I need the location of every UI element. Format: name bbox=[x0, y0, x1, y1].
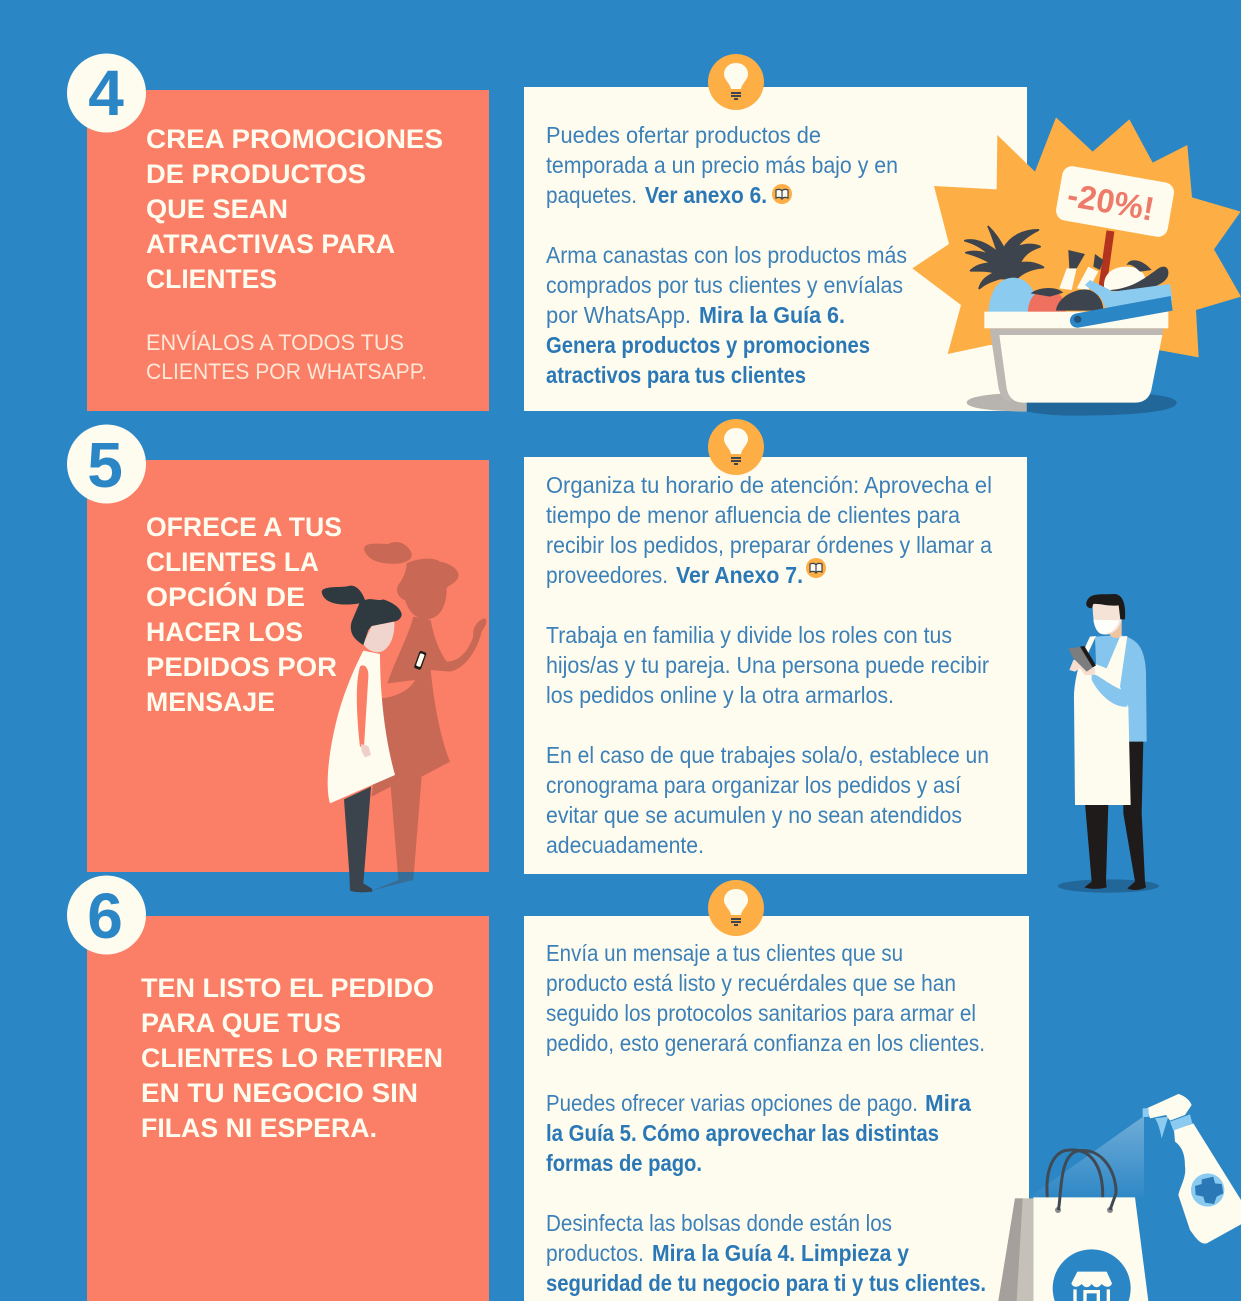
text block: step 4 tips: Puedes ofertar productos de bbox=[546, 122, 821, 148]
panel: step 4 heading card bbox=[87, 90, 489, 411]
icon: book annex 6 bbox=[772, 184, 792, 204]
panel: step 6 tips bbox=[524, 916, 1029, 1301]
text block: step 4 tips bbox=[546, 122, 907, 388]
heading: step 5: PEDIDOS POR bbox=[146, 652, 337, 682]
icon: book annex 7 bbox=[806, 558, 826, 578]
number badge 6 bbox=[67, 876, 146, 954]
panel: step 5 heading card bbox=[87, 460, 489, 872]
text block: step 6 tips: Mira la Guía 4. Limpieza y bbox=[652, 1240, 909, 1266]
subheading: step 4: CLIENTES POR WHATSAPP. bbox=[146, 359, 427, 384]
spray cone bbox=[1029, 1116, 1144, 1197]
heading: step 4: DE PRODUCTOS bbox=[146, 159, 366, 189]
subheading: step 4: ENVÍALOS A TODOS TUS bbox=[146, 330, 404, 355]
text block: step 5 tips: proveedores. bbox=[546, 562, 668, 588]
text block: step 4 tips: Genera productos y promociones bbox=[546, 332, 870, 358]
back bag handle bbox=[1047, 1150, 1103, 1197]
number badge 4: 4 bbox=[88, 57, 124, 129]
number badge 5 bbox=[67, 424, 146, 504]
heading: step 6: EN TU NEGOCIO SIN bbox=[141, 1078, 418, 1108]
illustration: discount basket: -20%! bbox=[1065, 177, 1157, 229]
heading: step 5: OPCIÓN DE bbox=[146, 581, 305, 612]
heading: step 6: CLIENTES LO RETIREN bbox=[141, 1043, 443, 1073]
text block: step 4 tips: temporada a un precio más bajo y en bbox=[546, 152, 898, 178]
text block: step 6 tips: formas de pago. bbox=[546, 1150, 702, 1176]
text block: step 6 tips: seguido los protocolos sanitarios para armar el bbox=[546, 1000, 976, 1026]
heading: step 5: CLIENTES LA bbox=[146, 547, 319, 577]
illustration: man with mask and tablet bbox=[1058, 594, 1159, 893]
heading: step 5: MENSAJE bbox=[146, 687, 275, 717]
icon: light bulb step 5 bbox=[708, 419, 764, 475]
panel: step 5 tips bbox=[524, 457, 1027, 874]
text block: step 4 tips: por WhatsApp. bbox=[546, 302, 691, 328]
text block: step 5 tips: cronograma para organizar los pedidos y así bbox=[546, 772, 962, 798]
text block: step 5 tips bbox=[546, 472, 992, 858]
panel: step 6 heading card bbox=[87, 916, 489, 1301]
heading: step 6: PARA QUE TUS bbox=[141, 1008, 341, 1038]
icon: light bulb step 4 bbox=[708, 54, 764, 110]
illustration: woman with phone and shadow bbox=[322, 542, 486, 892]
text block: step 6 tips: Desinfecta las bolsas donde están los bbox=[546, 1210, 892, 1236]
text block: step 4 tips: Mira la Guía 6. bbox=[699, 302, 845, 328]
text block: step 5 tips: En el caso de que trabajes sola/o, establece un bbox=[546, 742, 989, 768]
text block: step 4 tips: Arma canastas con los productos más bbox=[546, 242, 907, 268]
text block: step 4 tips: comprados por tus clientes y envíalas bbox=[546, 272, 903, 298]
heading: step 4: CLIENTES bbox=[146, 264, 277, 294]
text block: step 5 tips: tiempo de menor afluencia de clientes para bbox=[546, 502, 960, 528]
spray bottle bbox=[1143, 1094, 1241, 1244]
text block: step 4 tips: paquetes. bbox=[546, 182, 637, 208]
text block: step 5 tips: hijos/as y tu pareja. Una persona puede recibir bbox=[546, 652, 989, 678]
text block: step 6 tips: Puedes ofrecer varias opciones de pago. bbox=[546, 1090, 918, 1116]
paper bag bbox=[998, 1197, 1148, 1301]
heading: step 6: FILAS NI ESPERA. bbox=[141, 1113, 377, 1143]
text block: step 4 tips: atractivos para tus clientes bbox=[546, 362, 806, 388]
woman's shadow bbox=[364, 542, 486, 891]
heading: step 4: ATRACTIVAS PARA bbox=[146, 229, 395, 259]
text block: step 5 tips: Organiza tu horario de atención: Aprovecha el bbox=[546, 472, 992, 498]
text block: step 4 tips: Ver anexo 6. bbox=[645, 182, 767, 208]
illustration: discount basket bbox=[912, 117, 1241, 416]
panel: step 4 tips bbox=[524, 87, 1027, 411]
heading: step 5: HACER LOS bbox=[146, 617, 303, 647]
text block: step 5 tips: Ver Anexo 7. bbox=[676, 562, 803, 588]
text block: step 6 tips bbox=[546, 940, 986, 1296]
number badge 4 bbox=[67, 54, 146, 132]
text block: step 6 tips: Mira bbox=[925, 1090, 971, 1116]
heading: step 4: CREA PROMOCIONES bbox=[146, 124, 443, 154]
front bag handle bbox=[1058, 1151, 1116, 1210]
number badge 6: 6 bbox=[87, 880, 123, 952]
heading: step 5 bbox=[146, 512, 342, 717]
heading: step 6 bbox=[141, 973, 443, 1143]
text block: step 6 tips: productos. bbox=[546, 1240, 644, 1266]
subheading: step 4 bbox=[146, 330, 427, 384]
heading: step 4 bbox=[146, 124, 443, 294]
heading: step 6: TEN LISTO EL PEDIDO bbox=[141, 973, 434, 1003]
illustration: disinfected bag and spray bottle bbox=[998, 1094, 1241, 1301]
text block: step 6 tips: pedido, esto generará confianza en los clientes. bbox=[546, 1030, 985, 1056]
text block: step 5 tips: adecuadamente. bbox=[546, 832, 704, 858]
text block: step 6 tips: la Guía 5. Cómo aprovechar las distintas bbox=[546, 1120, 939, 1146]
icon: light bulb step 6 bbox=[708, 880, 764, 936]
text block: step 6 tips: seguridad de tu negocio para ti y tus clientes. bbox=[546, 1270, 986, 1296]
text block: step 6 tips: Envía un mensaje a tus clientes que su bbox=[546, 940, 903, 966]
text block: step 5 tips: los pedidos online y la otra armarlos. bbox=[546, 682, 894, 708]
text block: step 5 tips: Trabaja en familia y divide los roles con tus bbox=[546, 622, 952, 648]
heading: step 4: QUE SEAN bbox=[146, 194, 288, 224]
text block: step 6 tips: producto está listo y recuérdales que se han bbox=[546, 970, 956, 996]
text block: step 5 tips: evitar que se acumulen y no sean atendidos bbox=[546, 802, 962, 828]
number badge 5: 5 bbox=[87, 429, 123, 501]
heading: step 5: OFRECE A TUS bbox=[146, 512, 342, 542]
text block: step 5 tips: recibir los pedidos, preparar órdenes y llamar a bbox=[546, 532, 992, 558]
